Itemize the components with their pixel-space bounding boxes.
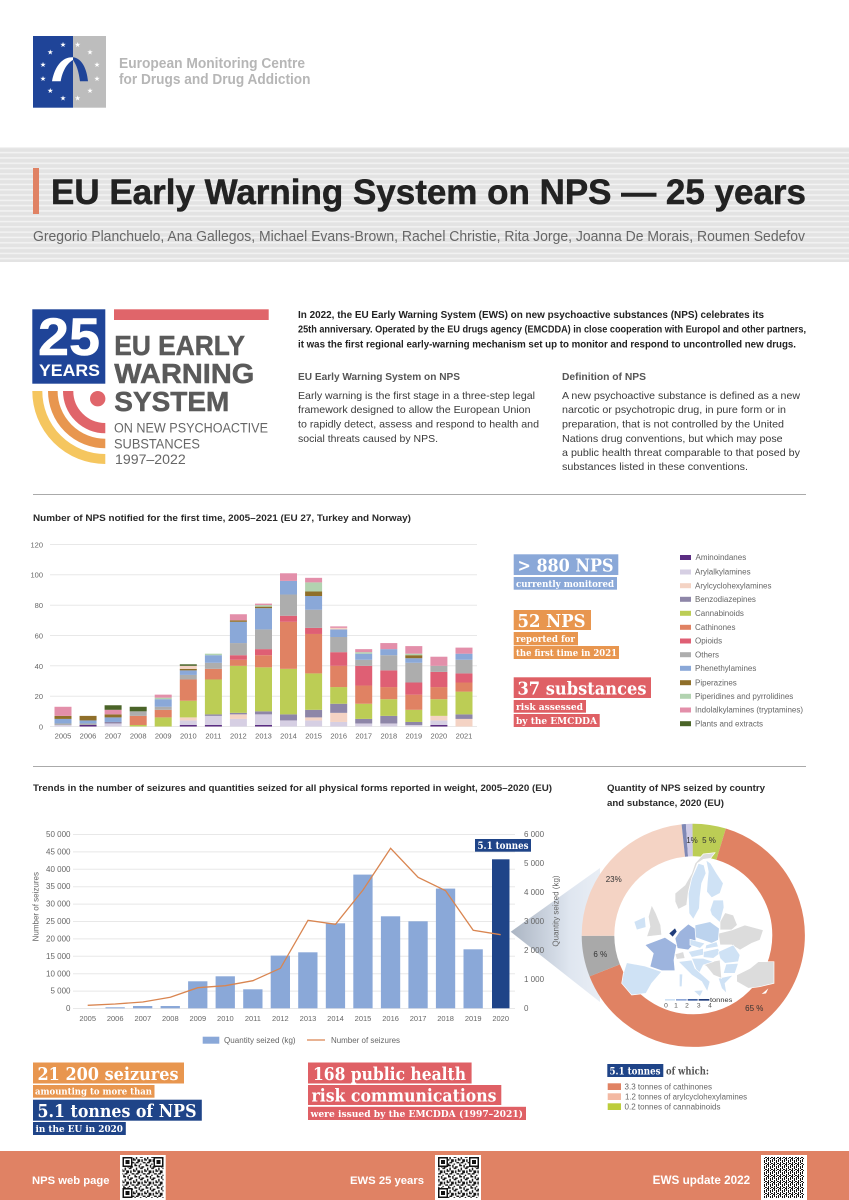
callout: 168 public health risk communications: were issued by the EMCDDA (1997–2021) — [310, 1109, 523, 1120]
callout: 880 NPS monitored: currently monitored — [516, 579, 614, 590]
combo chart: seizures and quantity — [32, 830, 560, 1045]
combo chart: seizures and quantity: 2008 — [162, 1014, 179, 1023]
QR code — [435, 1155, 481, 1200]
badge: 25 years: YEARS — [39, 361, 100, 380]
map legend: 3 — [697, 1002, 701, 1009]
combo chart: seizures and quantity: 2015 — [355, 1014, 371, 1023]
EMCDDA logo: ★ — [40, 75, 46, 83]
stacked bar chart: NPS notified per year: 2005 — [55, 732, 71, 740]
combo chart: seizures and quantity: 2012 — [272, 1014, 289, 1023]
chart legend: substance groups: Arylcyclohexylamines — [695, 581, 771, 590]
stacked bar chart: NPS notified per year: 2011 — [205, 732, 221, 740]
stacked bar chart: NPS notified per year — [30, 540, 477, 740]
chart legend: substance groups: Arylalkylamines — [695, 568, 751, 577]
combo chart: seizures and quantity: 2017 — [410, 1014, 426, 1023]
legend: 5.1 tonnes of which: 3.3 tonnes of cathinones — [624, 1082, 712, 1092]
EMCDDA logo: ★ — [87, 48, 93, 56]
chart legend: substance groups: Piperazines — [695, 678, 737, 687]
combo chart: seizures and quantity: 2020 — [492, 1014, 509, 1023]
heading: NPS notified chart: Number of NPS notified for the first time, 2005–2021 (EU 27, Turkey and Norway) — [33, 513, 411, 524]
25 years EWS logo — [32, 308, 269, 467]
intro text: it was the first regional early-warning mechanism set up to monitor and respond to uncontrolled new drugs. — [298, 340, 796, 350]
EMCDDA logo: ★ — [47, 48, 53, 56]
combo chart: seizures and quantity: 6 000 — [524, 830, 545, 839]
red bar — [114, 309, 269, 320]
text block: EU Early Warning System on NPS: Early warning is the first stage in a three-step legal — [298, 390, 535, 402]
text block: definition of NPS: substances listed in these conventions. — [562, 461, 748, 473]
connector fan from 2020 bar to donut — [511, 868, 600, 1002]
text block: EU Early Warning System on NPS: framework designed to allow the European Union — [298, 404, 531, 416]
combo chart: seizures and quantity: 2006 — [107, 1014, 124, 1023]
combo chart: seizures and quantity: 2014 — [327, 1014, 344, 1023]
chart legend: substance groups: Aminoindanes — [696, 553, 746, 562]
striped title band — [0, 147, 849, 262]
QR code — [761, 1155, 807, 1200]
organisation name: European Monitoring Centre — [119, 56, 305, 72]
EMCDDA logo — [33, 36, 106, 108]
EMCDDA logo: ★ — [87, 87, 93, 95]
footer band — [0, 1151, 849, 1200]
stacked bar chart: NPS notified per year: 2016 — [330, 732, 347, 740]
chart legend: substance groups: Indolalkylamines (tryptamines) — [695, 706, 803, 715]
link: NPS web page: NPS web page — [32, 1175, 110, 1187]
combo chart: seizures and quantity: Quantity seized (kg) — [552, 875, 560, 947]
combo chart: seizures and quantity: 2011 — [245, 1014, 261, 1023]
intro text — [298, 310, 806, 350]
title: EU Early Warning System on NPS — 25 years — [51, 173, 806, 212]
link: NPS web page — [32, 1155, 166, 1200]
map legend: tonnes — [710, 997, 733, 1004]
combo chart: seizures and quantity: 15 000 — [46, 952, 71, 961]
combo chart: seizures and quantity: 35 000 — [46, 882, 71, 891]
combo chart: seizures and quantity: 0 — [66, 1004, 71, 1013]
text block: EU Early Warning System on NPS: social threats caused by NPS. — [298, 433, 438, 445]
callout: 21 200 seizures: 5.1 tonnes of NPS — [38, 1101, 196, 1122]
donut labels — [593, 836, 763, 1013]
combo chart: seizures and quantity: 2018 — [437, 1014, 454, 1023]
EMCDDA logo: ★ — [94, 75, 100, 83]
combo chart: seizures and quantity: 30 000 — [46, 900, 71, 909]
combo chart: seizures and quantity: 40 000 — [46, 865, 71, 874]
stacked bar chart: NPS notified per year: 20 — [35, 692, 43, 701]
combo chart: seizures and quantity: 2010 — [217, 1014, 234, 1023]
donut labels: 23% — [606, 875, 622, 884]
label: 5.1 tonnes: 5.1 tonnes — [478, 841, 529, 852]
donut labels: 65 % — [745, 1004, 763, 1013]
stacked bar chart: NPS notified per year: 2008 — [130, 732, 147, 740]
callout: 168 public health risk communications — [308, 1062, 526, 1120]
callout: 168 public health risk communications: 168 public health — [313, 1064, 466, 1085]
combo chart: seizures and quantity: 4 000 — [524, 888, 545, 897]
callout: 52 NPS reported: the first time in 2021 — [516, 648, 617, 659]
combo chart: seizures and quantity: 2005 — [79, 1014, 96, 1023]
intro text: In 2022, the EU Early Warning System (EWS) on new psychoactive substances (NPS) celebrates its — [298, 310, 764, 321]
text block: EU Early Warning System on NPS: to rapidly detect, assess and respond to health and — [298, 418, 539, 430]
combo chart: seizures and quantity: 20 000 — [46, 934, 71, 944]
callout: 21 200 seizures — [33, 1062, 202, 1135]
stacked bar chart: NPS notified per year: 2007 — [105, 732, 121, 740]
stacked bar chart: NPS notified per year: 2017 — [355, 732, 372, 740]
chart legend: substance groups: Cannabinoids — [695, 609, 744, 618]
logo heading: WARNING — [114, 358, 254, 389]
EMCDDA logo: ★ — [75, 41, 81, 49]
heading: seizures chart: Trends in the number of seizures and quantities seized for all physical forms reported in weight, 2005–2020 (EU) — [33, 783, 552, 794]
chart legend: substance groups: Opioids — [695, 637, 722, 646]
stacked bar chart: NPS notified per year: 2014 — [280, 732, 297, 740]
stacked bar chart: NPS notified per year: 40 — [35, 662, 43, 671]
callout: 880 NPS monitored: > 880 NPS — [518, 556, 614, 576]
map legend: 0 — [664, 1002, 668, 1009]
chart legend: substance groups: Plants and extracts — [695, 719, 763, 728]
map legend: 1 — [674, 1002, 678, 1009]
donut labels: 1% — [686, 836, 698, 845]
authors: Gregorio Planchuelo, Ana Gallegos, Michael Evans-Brown, Rachel Christie, Rita Jorge, Joanna De Morais, Roumen Sedefov — [33, 229, 806, 245]
stacked bar chart: NPS notified per year: 0 — [39, 722, 43, 732]
link: EWS update 2022 — [653, 1155, 807, 1200]
stacked bar chart: NPS notified per year: 2019 — [405, 732, 422, 740]
stacked bar chart: NPS notified per year: 2009 — [155, 732, 172, 740]
callout: 21 200 seizures: amounting to more than — [35, 1088, 152, 1098]
intro text: 25th anniversary. Operated by the EU drugs agency (EMCDDA) in close cooperation with Europol and other partners, — [298, 325, 806, 336]
link: EWS update 2022: EWS update 2022 — [653, 1175, 750, 1187]
logo subheading: ON NEW PSYCHOACTIVE — [114, 421, 268, 436]
legend: 5.1 tonnes of which: 1.2 tonnes of arylcyclohexylamines — [625, 1092, 747, 1102]
combo chart: seizures and quantity: 1 000 — [524, 975, 545, 984]
logo heading — [114, 330, 254, 417]
text block: definition of NPS — [562, 371, 801, 473]
combo chart: seizures and quantity: 10 000 — [46, 969, 71, 978]
badge: 25 years: 25 — [38, 308, 100, 367]
stacked bar chart: NPS notified per year: 80 — [35, 601, 43, 610]
chart legend: substance groups: Piperidines and pyrrolidines — [695, 692, 793, 701]
callout: 37 substances: risk assessed — [516, 702, 583, 713]
chart legend: substance groups: Phenethylamines — [695, 664, 756, 673]
text block: definition of NPS: Definition of NPS — [562, 371, 646, 383]
chart legend: substance groups: Others — [695, 650, 719, 659]
EMCDDA logo: ★ — [94, 61, 100, 69]
legend: 5.1 tonnes of which: 0.2 tonnes of cannabinoids — [624, 1102, 720, 1112]
text block: EU Early Warning System on NPS: EU Early Warning System on NPS — [298, 371, 460, 383]
EMCDDA logo: ★ — [75, 94, 81, 102]
chart legend: substance groups: Benzodiazepines — [695, 595, 756, 604]
callout: 21 200 seizures: in the EU in 2020 — [36, 1124, 123, 1135]
legend: 5.1 tonnes of which — [607, 1064, 747, 1112]
organisation name — [119, 56, 310, 88]
combo chart: seizures and quantity: 50 000 — [46, 830, 71, 839]
callout: 52 NPS reported — [514, 610, 619, 659]
badge: 25 years — [32, 308, 105, 384]
combo chart: seizures and quantity: 2009 — [189, 1014, 206, 1023]
link: EWS 25 years: EWS 25 years — [350, 1175, 424, 1187]
EMCDDA logo: ★ — [40, 61, 46, 69]
combo chart: seizures and quantity: 2007 — [134, 1014, 151, 1023]
combo chart: seizures and quantity: 2 000 — [524, 946, 545, 955]
callout: 880 NPS monitored — [514, 554, 618, 590]
stacked bar chart: NPS notified per year: 120 — [30, 540, 43, 550]
donut labels: 5 % — [702, 836, 716, 845]
text block: definition of NPS: a public health threat comparable to that posed by — [562, 447, 801, 459]
stacked bar chart: NPS notified per year: 2013 — [255, 732, 272, 740]
stacked bar chart: NPS notified per year: 2015 — [305, 732, 322, 740]
callout: 52 NPS reported: 52 NPS — [518, 611, 586, 632]
callout: 37 substances: 37 substances — [518, 678, 646, 700]
map legend: 2 — [685, 1002, 689, 1009]
heading: donut chart — [607, 783, 766, 809]
chart legend: substance groups: Cathinones — [695, 623, 735, 632]
text block: EU Early Warning System on NPS — [298, 371, 539, 445]
QR code — [120, 1155, 166, 1200]
logo heading: EU EARLY — [114, 330, 245, 361]
legend: 5.1 tonnes of which: 5.1 tonnes — [610, 1066, 661, 1077]
icon: signal arcs — [37, 391, 105, 459]
stacked bar chart: NPS notified per year: 2012 — [230, 732, 247, 740]
combo chart: seizures and quantity: 5 000 — [524, 859, 545, 868]
callout: 37 substances — [514, 677, 651, 727]
callout: 37 substances: by the EMCDDA — [516, 716, 598, 727]
combo chart: seizures and quantity: 2019 — [465, 1014, 482, 1023]
chart legend: Number of seizures — [331, 1036, 400, 1045]
title accent bar — [33, 168, 39, 214]
EMCDDA logo: ★ — [60, 41, 66, 49]
stacked bar chart: NPS notified per year: 2018 — [380, 732, 397, 740]
combo chart: seizures and quantity: 0 — [524, 1004, 529, 1013]
link: EWS 25 years — [350, 1155, 481, 1200]
EMCDDA logo: ★ — [47, 87, 53, 95]
logo subheading: SUBSTANCES — [114, 436, 200, 451]
text block: definition of NPS: preparation, that is not controlled by the United — [562, 418, 784, 430]
text block: definition of NPS: A new psychoactive substance is defined as a new — [562, 390, 800, 402]
map legend — [664, 997, 733, 1009]
stacked bar chart: NPS notified per year: 60 — [35, 632, 43, 640]
seizures line — [88, 848, 501, 1005]
donut chart: quantity by substance — [593, 836, 789, 1031]
combo chart: seizures and quantity: 2016 — [382, 1014, 399, 1023]
combo chart: seizures and quantity: Number of seizures — [32, 872, 40, 941]
combo chart: seizures and quantity: 25 000 — [46, 917, 71, 926]
combo chart: seizures and quantity: 45 000 — [46, 848, 71, 856]
donut labels: 6 % — [593, 950, 607, 959]
legend: 5.1 tonnes of which: of which: — [666, 1066, 709, 1077]
stacked bar chart: NPS notified per year: 2021 — [456, 732, 472, 740]
combo chart: seizures and quantity: 2013 — [300, 1014, 316, 1023]
callout: 52 NPS reported: reported for — [516, 634, 576, 645]
stacked bar chart: NPS notified per year: 2020 — [431, 732, 447, 740]
chart legend — [203, 1036, 400, 1045]
highlighted 2020 bar — [492, 859, 510, 1008]
heading: donut chart: Quantity of NPS seized by country — [607, 783, 766, 794]
logo heading: SYSTEM — [114, 386, 229, 417]
logo subheading — [114, 421, 268, 467]
chart legend: Quantity seized (kg) — [224, 1036, 296, 1045]
map of Europe — [622, 853, 774, 1009]
EMCDDA logo: ★ — [60, 94, 66, 102]
callout: 168 public health risk communications: risk communications — [312, 1086, 496, 1106]
callout: 21 200 seizures: 21 200 seizures — [38, 1064, 178, 1085]
text block: definition of NPS: narcotic or psychotropic drug, in pure form or in — [562, 404, 786, 416]
chart legend: substance groups — [680, 553, 803, 728]
logo subheading: 1997–2022 — [115, 452, 186, 467]
text block: definition of NPS: Nations drug conventions, but which may pose — [562, 433, 783, 445]
combo chart: seizures and quantity: 5 000 — [50, 987, 71, 996]
map legend: 4 — [708, 1002, 712, 1009]
organisation name: for Drugs and Drug Addiction — [119, 72, 310, 88]
stacked bar chart: NPS notified per year: 2010 — [180, 732, 197, 740]
heading: donut chart: and substance, 2020 (EU) — [607, 798, 724, 809]
stacked bar chart: NPS notified per year: 100 — [30, 570, 43, 580]
stacked bar chart: NPS notified per year: 2006 — [80, 732, 96, 740]
combo chart: seizures and quantity: 3 000 — [524, 917, 545, 926]
